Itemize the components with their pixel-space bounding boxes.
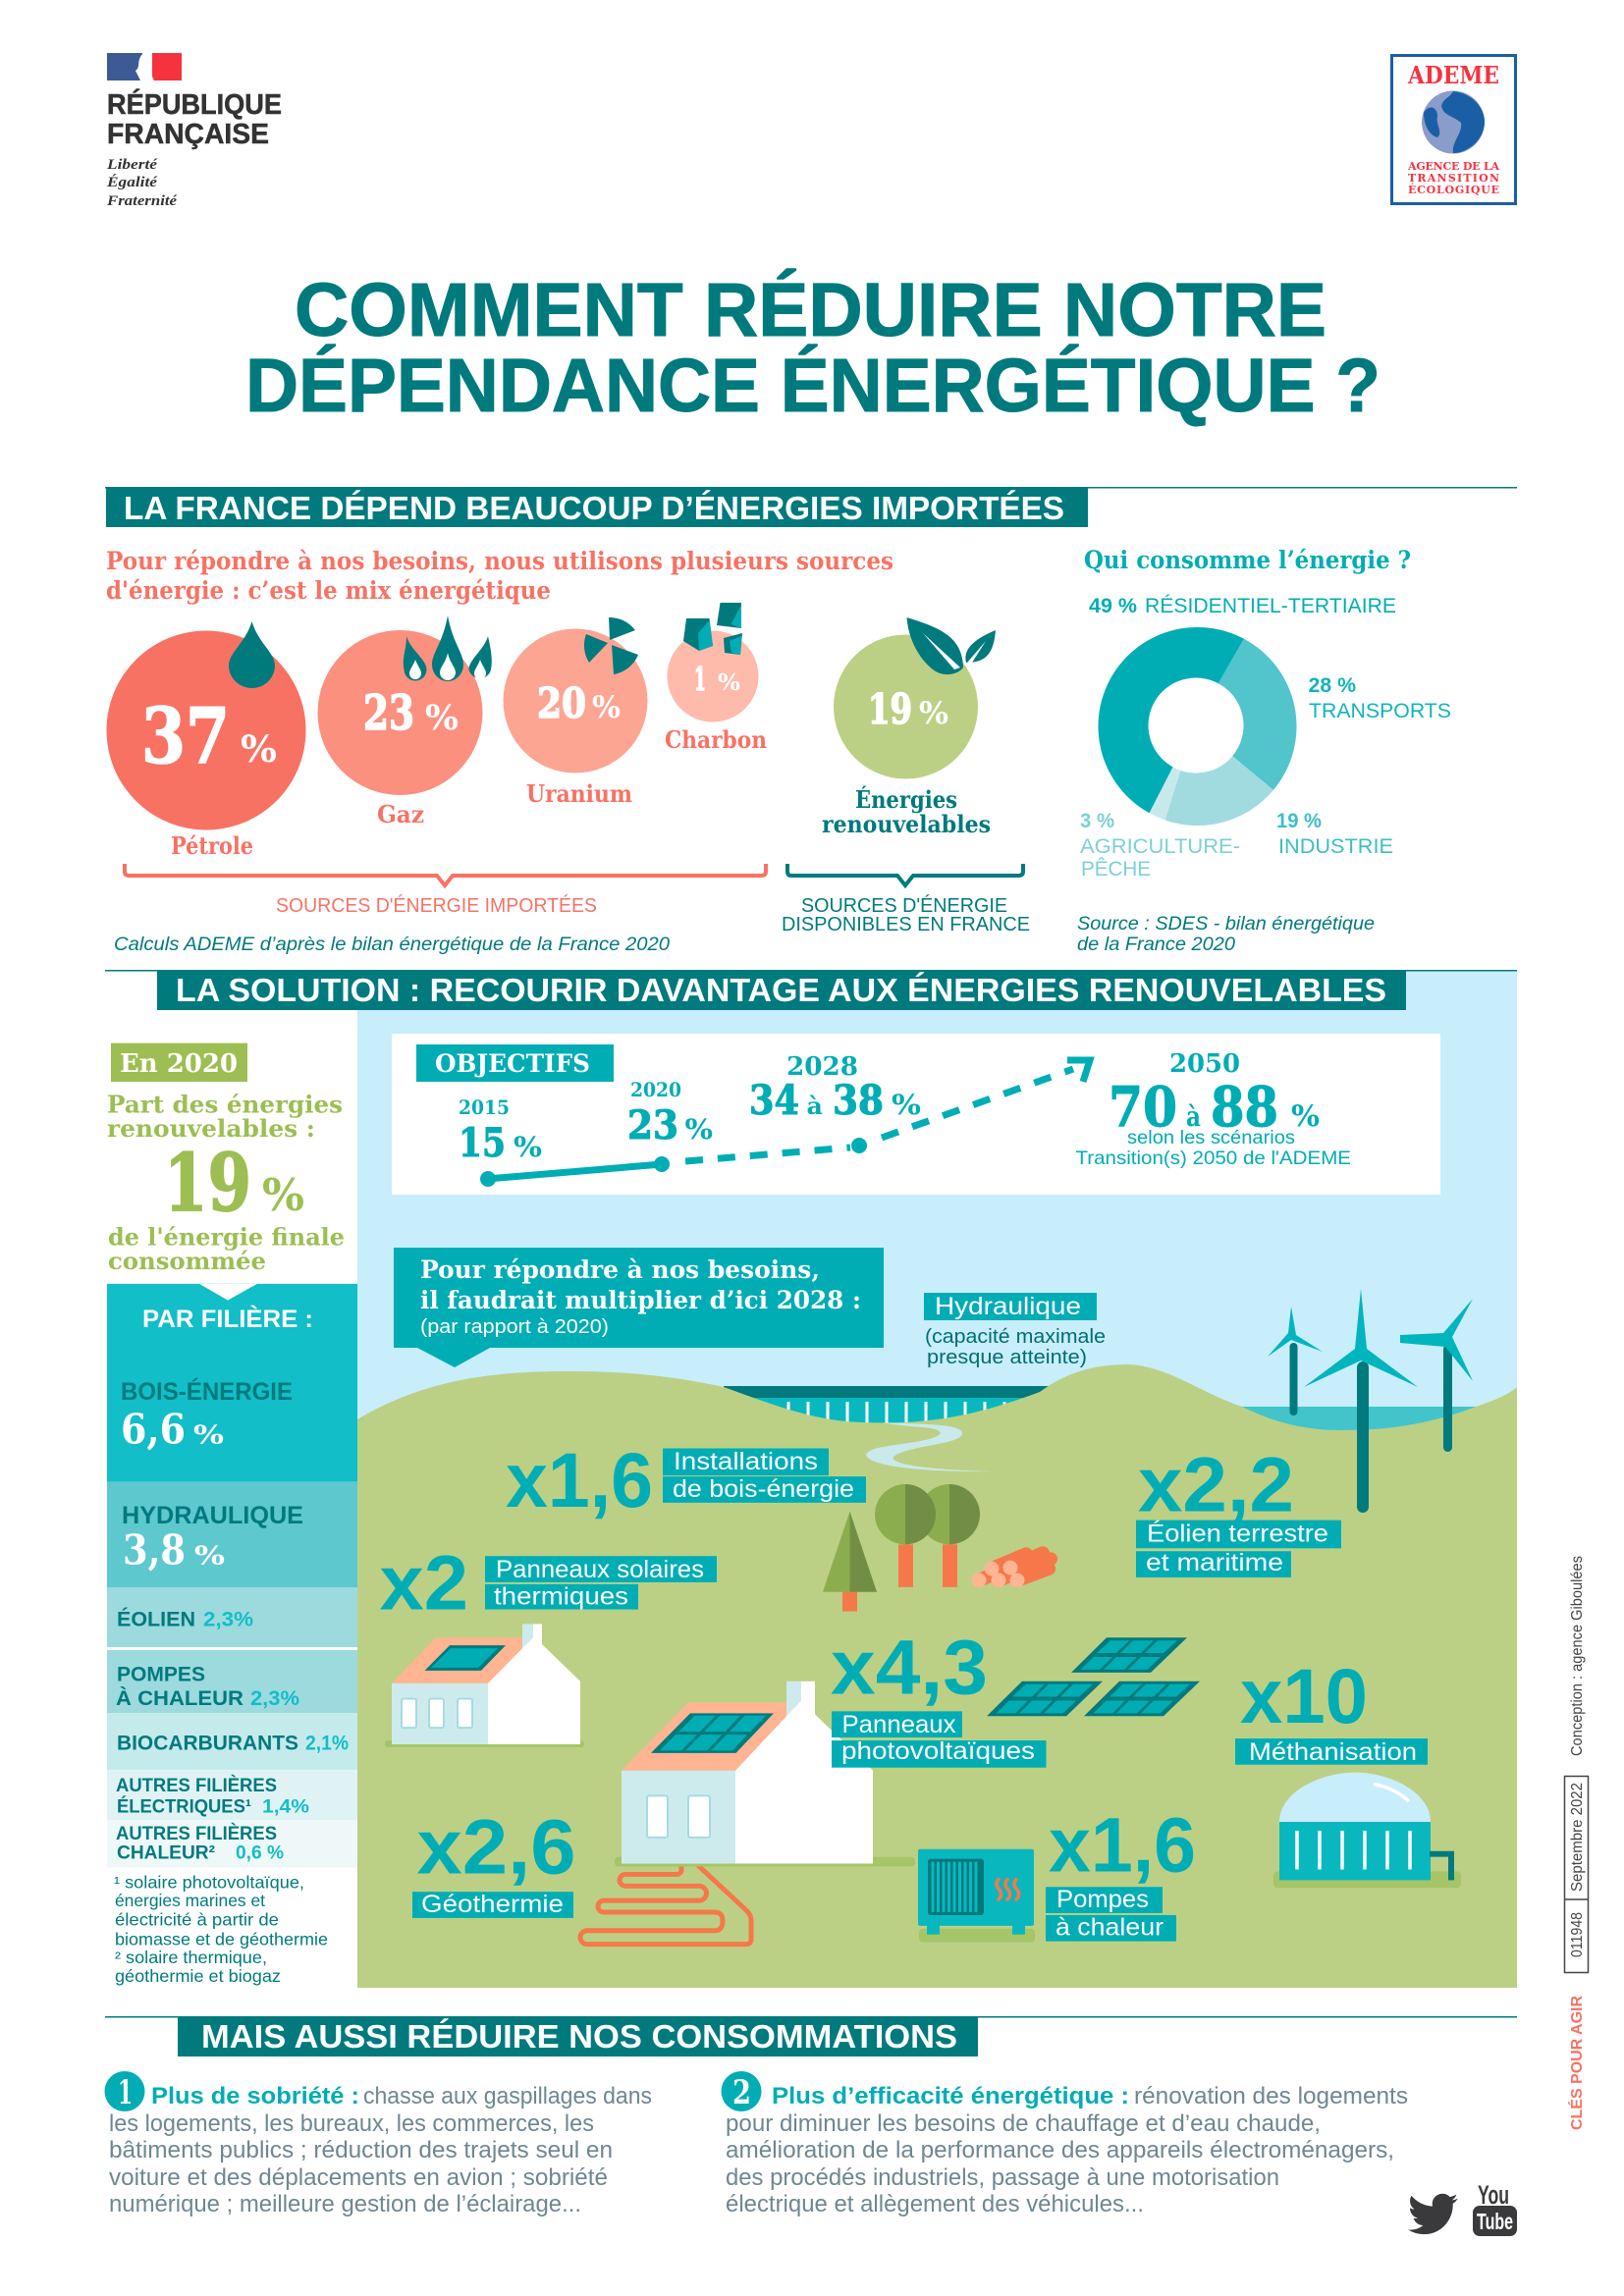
panel left <box>987 1682 1103 1716</box>
bubble: Pétrole 37 %: 37 <box>141 692 230 781</box>
text block: efficacité: rénovation des logements <box>1134 2083 1408 2109</box>
heading: energy mix: Pour répondre à nos besoins, nous utilisons plusieurs sources <box>106 547 893 575</box>
callout: multiply by 2028: (par rapport à 2020) <box>420 1316 609 1338</box>
label: residential: RÉSIDENTIEL-TERTIAIRE <box>1145 595 1396 617</box>
item: photovoltaïque: Panneaux <box>841 1712 956 1738</box>
icon: geothermal pipe <box>580 1864 751 1945</box>
scenarios note: selon les scénarios <box>1127 1128 1295 1148</box>
callout: multiply by 2028: il faudrait multiplier d’ici 2028 : <box>420 1286 861 1314</box>
label: hydraulique <box>924 1293 1106 1368</box>
panel right <box>1084 1682 1200 1716</box>
bubble: Uranium 20 % <box>503 617 648 808</box>
row: bois-énergie: % <box>193 1419 224 1450</box>
source note: Source : SDES - bilan énergétique <box>1077 913 1375 934</box>
bracket: domestic sources: DISPONIBLES EN FRANCE <box>782 913 1030 935</box>
illustration: dam <box>724 1386 1058 1427</box>
section banner: solution: LA SOLUTION : RECOURIR DAVANTAGE AUX ÉNERGIES RENOUVELABLES <box>176 972 1386 1008</box>
bracket: imported sources <box>125 864 766 917</box>
label: industry: INDUSTRIE <box>1278 835 1393 858</box>
row: autres filières chaleur: AUTRES FILIÈRES <box>116 1822 277 1844</box>
icon: oil drop <box>229 621 275 688</box>
date and reference box <box>1564 1777 1589 1973</box>
bubble: Gaz 23 %: Gaz <box>377 800 424 828</box>
title <box>245 268 1380 428</box>
panel: En 2020 share: 19 <box>164 1138 251 1230</box>
motto: Fraternité <box>106 193 179 209</box>
label: hydraulique: presque atteinte) <box>927 1347 1087 1368</box>
2050 value: 88 <box>1211 1075 1278 1140</box>
bubble: Charbon 1 %: 1 <box>694 660 706 698</box>
icon: heat pump <box>918 1849 1035 1943</box>
illustration: wind turbines <box>1268 1289 1473 1513</box>
bubble: Uranium 20 %: Uranium <box>526 779 632 808</box>
item: solaire thermique: x2 <box>379 1539 468 1626</box>
item: bois-énergie: Installations <box>674 1449 818 1475</box>
item: géothermie: Géothermie <box>421 1892 564 1918</box>
text block: efficacité: électrique et allègement des véhicules... <box>726 2191 1144 2217</box>
row: éolien: ÉOLIEN <box>117 1607 195 1630</box>
bubble: Charbon 1 % <box>665 603 767 754</box>
motto: Liberté <box>106 157 159 173</box>
icon: house with solar thermal panel <box>385 1624 584 1747</box>
logo: République Française <box>106 53 282 209</box>
2015 value: % <box>514 1131 542 1163</box>
section banner: imported energies <box>105 487 1517 527</box>
label: agriculture: 3 % <box>1080 810 1114 832</box>
row: pompes à chaleur: À CHALEUR <box>116 1685 244 1710</box>
icon: radiation <box>584 617 638 674</box>
bubble: Gaz 23 %: % <box>425 698 459 738</box>
row: autres filières chaleur: 0,6 % <box>236 1842 284 1864</box>
item: pompes à chaleur: x1,6 <box>1049 1801 1196 1888</box>
icon: YouTube: Tube <box>1477 2209 1513 2234</box>
icon: house with photovoltaic panels <box>615 1682 915 1867</box>
2020 value <box>627 1078 713 1148</box>
title: COMMENT RÉDUIRE NOTRE <box>295 268 1326 352</box>
footnotes: géothermie et biogaz <box>115 1966 281 1986</box>
logo: ADEME: AGENCE DE LA <box>1407 160 1499 173</box>
2020 value: % <box>685 1113 713 1146</box>
logo wordmark: FRANÇAISE <box>107 119 269 150</box>
item: solaire thermique: thermiques <box>494 1584 628 1611</box>
footnotes: ¹ solaire photovoltaïque, <box>114 1872 304 1892</box>
bubble: Pétrole 37 %: Pétrole <box>171 831 253 860</box>
illustration: river <box>866 1422 993 1471</box>
heading: energy mix: d'énergie : c’est le mix énergétique <box>106 576 551 605</box>
turbine large centre <box>1304 1289 1418 1513</box>
section banner: reduce consumption <box>105 2016 1517 2056</box>
text block: efficacité: amélioration de la performance des appareils électroménagers, <box>726 2137 1394 2163</box>
logo: ADEME: TRANSITION <box>1408 172 1499 185</box>
scenarios note: Transition(s) 2050 de l'ADEME <box>1076 1148 1351 1169</box>
icon: gas flames <box>404 615 492 681</box>
row: bois-énergie: BOIS-ÉNERGIE <box>121 1378 293 1406</box>
bubble: Énergies renouvelables 19 %: 19 <box>868 685 912 733</box>
callout: multiply by 2028 <box>394 1248 884 1367</box>
logo: ADEME: ADEME <box>1407 61 1499 89</box>
item: bois-énergie <box>506 1436 866 1523</box>
bubble: Énergies renouvelables 19 %: Énergies <box>855 785 957 814</box>
footnotes: énergies marines et <box>115 1891 265 1910</box>
badge 2: 2 <box>732 2073 751 2112</box>
panel: En 2020 share: Part des énergies <box>107 1091 343 1118</box>
item: bois-énergie: de bois-énergie <box>673 1476 854 1503</box>
badge 1 <box>104 2071 145 2112</box>
credits: vertical side text: Conception : agence Giboulées <box>1569 1556 1586 1756</box>
2050 value: 70 <box>1109 1075 1177 1140</box>
source note: de la France 2020 <box>1077 934 1235 955</box>
panel: objectives <box>392 1034 1440 1195</box>
row: biocarburants: 2,1% <box>305 1731 349 1754</box>
text block: efficacité: pour diminuer les besoins de chauffage et d’eau chaude, <box>726 2110 1321 2137</box>
motto <box>106 157 179 209</box>
footnotes: biomasse et de géothermie <box>115 1929 328 1949</box>
icon: globe <box>1422 90 1485 153</box>
row: hydraulique: % <box>194 1541 225 1571</box>
item: pompes à chaleur <box>1046 1801 1196 1942</box>
panel: renewable energy multipliers on the landscape <box>379 1436 1461 1945</box>
2028 value <box>749 1052 921 1124</box>
row: autres filières chaleur <box>107 1820 357 1868</box>
row: bois-énergie: 6,6 <box>121 1406 186 1454</box>
date and reference box: 011948 <box>1569 1912 1586 1957</box>
row: biocarburants: BIOCARBURANTS <box>117 1731 298 1754</box>
2028 value: 2028 <box>786 1052 858 1082</box>
heading: Qui consomme l’énergie ? <box>1084 546 1411 574</box>
2015 value: 15 <box>459 1120 506 1166</box>
text block: sobriété: bâtiments publics ; réduction des trajets seul en <box>109 2137 613 2163</box>
bubble: Uranium 20 %: % <box>592 690 621 725</box>
bubble: Énergies renouvelables 19 % <box>822 617 996 838</box>
panel: En 2020 share: renouvelables : <box>107 1114 315 1143</box>
item: photovoltaïque: x4,3 <box>831 1624 988 1710</box>
bubble: Charbon 1 %: % <box>718 669 740 696</box>
logo wordmark: RÉPUBLIQUE <box>107 87 282 121</box>
text block: efficacité: Plus d’efficacité énergétique : <box>772 2083 1129 2109</box>
2050 value: % <box>1291 1099 1320 1134</box>
row: éolien: 2,3% <box>203 1607 253 1630</box>
item: méthanisation: x10 <box>1240 1653 1368 1739</box>
2028 value: 34 <box>749 1077 799 1124</box>
2028 value: % <box>892 1089 921 1121</box>
label: transports <box>1308 674 1451 722</box>
footnotes <box>114 1872 328 1986</box>
panel: En 2020 share: % <box>262 1168 304 1221</box>
label: industry: 19 % <box>1276 810 1322 832</box>
row: autres filières électriques: 1,4% <box>262 1796 309 1817</box>
title: DÉPENDANCE ÉNERGÉTIQUE ? <box>245 344 1380 428</box>
round tree back <box>919 1484 980 1587</box>
item: pompes à chaleur: à chaleur <box>1056 1915 1164 1942</box>
item: solaire thermique: Panneaux solaires <box>496 1557 704 1583</box>
icon: French flag with Marianne <box>107 53 182 80</box>
row: pompes à chaleur <box>107 1650 357 1713</box>
item: éolien: x2,2 <box>1138 1441 1294 1528</box>
2028 value: 38 <box>833 1077 884 1124</box>
item: photovoltaïque <box>831 1624 1047 1768</box>
bubble: Pétrole 37 % <box>106 621 306 860</box>
badge: En 2020 <box>120 1048 238 1079</box>
label: transports: 28 % <box>1308 674 1356 697</box>
row: hydraulique: 3,8 <box>123 1526 186 1575</box>
label: industry <box>1276 810 1393 858</box>
item: méthanisation: Méthanisation <box>1249 1739 1417 1766</box>
icon: coal <box>683 603 742 655</box>
bubble: Énergies renouvelables 19 %: renouvelables <box>822 810 991 838</box>
row: éolien <box>107 1587 357 1647</box>
text block: sobriété: voiture et des déplacements en avion ; sobriété <box>109 2164 608 2191</box>
turbine right <box>1400 1299 1473 1452</box>
icon: solar panels array <box>987 1637 1200 1716</box>
2050 value: 2050 <box>1169 1049 1240 1079</box>
text block: efficacité <box>721 2071 1408 2217</box>
source note <box>1077 913 1375 955</box>
section banner: reduce consumption: MAIS AUSSI RÉDUIRE NOS CONSOMMATIONS <box>201 2018 957 2055</box>
label: hydraulique: (capacité maximale <box>925 1326 1106 1348</box>
panel: by sector <box>107 1284 357 1986</box>
label: transports: TRANSPORTS <box>1309 700 1451 722</box>
logo wordmark <box>107 87 282 150</box>
2015 value <box>459 1095 542 1166</box>
bubble: Gaz 23 % <box>318 615 492 828</box>
row: autres filières électriques: AUTRES FILIÈRES <box>116 1774 277 1796</box>
item: méthanisation <box>1235 1653 1428 1766</box>
bubble: Pétrole 37 %: % <box>241 727 277 771</box>
panel: En 2020 share: de l'énergie finale <box>108 1223 345 1251</box>
2028 value: à <box>807 1092 823 1120</box>
panel: En 2020 share: consommée <box>108 1247 266 1275</box>
fir tree <box>823 1512 877 1612</box>
icon: YouTube: You <box>1478 2180 1509 2210</box>
section banner: imported energies: LA FRANCE DÉPEND BEAUCOUP D’ÉNERGIES IMPORTÉES <box>124 490 1064 526</box>
text block: sobriété: les logements, les bureaux, les commerces, les <box>109 2110 594 2137</box>
bubble: Gaz 23 %: 23 <box>363 684 414 741</box>
label: agriculture: AGRICULTURE- <box>1080 835 1240 858</box>
bubble: Énergies renouvelables 19 %: % <box>919 696 948 731</box>
2050 value: à <box>1186 1100 1201 1133</box>
item: photovoltaïque: photovoltaïques <box>841 1738 1035 1765</box>
label: hydraulique: Hydraulique <box>935 1293 1081 1320</box>
donut chart <box>1098 627 1297 826</box>
row: bois-énergie <box>107 1284 357 1482</box>
credits: vertical side text <box>1564 1556 1589 2130</box>
bubble: Charbon 1 %: Charbon <box>665 725 767 754</box>
2050 value <box>1109 1049 1320 1140</box>
badge 2 <box>721 2071 762 2112</box>
row: autres filières chaleur: CHALEUR² <box>117 1842 215 1864</box>
text block: sobriété: numérique ; meilleure gestion de l’éclairage... <box>109 2191 581 2217</box>
panel: sky background <box>357 971 1517 1422</box>
row: pompes à chaleur: POMPES <box>117 1662 205 1685</box>
logs <box>972 1553 1051 1587</box>
bracket: domestic sources: SOURCES D'ÉNERGIE <box>801 894 1007 917</box>
badge 1: 1 <box>118 2073 133 2112</box>
row: biocarburants <box>107 1713 357 1770</box>
icon: biogas digester <box>1273 1773 1461 1888</box>
text block: sobriété: Plus de sobriété : <box>151 2083 359 2109</box>
row: hydraulique <box>107 1482 357 1587</box>
row: hydraulique: HYDRAULIQUE <box>122 1503 303 1529</box>
item: solaire thermique <box>379 1539 717 1626</box>
icon: Twitter <box>1408 2194 1458 2234</box>
credits: vertical side text: CLÉS POUR AGIR <box>1567 1996 1586 2130</box>
2020 value: 2020 <box>630 1078 681 1101</box>
row: autres filières électriques: ÉLECTRIQUES¹ <box>117 1795 251 1817</box>
footnotes: ² solaire thermique, <box>115 1948 267 1967</box>
callout: multiply by 2028: Pour répondre à nos besoins, <box>420 1255 820 1284</box>
label: agriculture <box>1080 810 1240 881</box>
text block: sobriété <box>104 2071 652 2217</box>
item: bois-énergie: x1,6 <box>506 1436 653 1523</box>
text block: sobriété: chasse aux gaspillages dans <box>363 2083 652 2109</box>
row: bois-énergie: PAR FILIÈRE : <box>142 1306 313 1333</box>
turbine small left <box>1268 1307 1323 1415</box>
item: éolien <box>1136 1441 1341 1577</box>
motto: Égalité <box>106 174 159 190</box>
bracket: domestic sources <box>782 864 1030 935</box>
date and reference box: Septembre 2022 <box>1569 1783 1586 1892</box>
bubble: Uranium 20 %: 20 <box>537 679 586 727</box>
illustration: sea <box>1227 1407 1476 1443</box>
panel top <box>1071 1637 1187 1673</box>
bracket: imported sources: SOURCES D'ÉNERGIE IMPORTÉES <box>276 894 597 917</box>
text block: efficacité: des procédés industriels, passage à une motorisation <box>726 2164 1279 2191</box>
badge: objectifs <box>416 1044 614 1082</box>
item: pompes à chaleur: Pompes <box>1056 1887 1149 1913</box>
logo: ADEME <box>1392 55 1516 204</box>
trend line <box>480 1060 1090 1187</box>
icon: leaves <box>907 617 996 674</box>
icon: trees and logs <box>823 1484 1051 1612</box>
row: autres filières électriques <box>107 1770 357 1820</box>
scenarios note <box>1076 1128 1351 1169</box>
illustration: hills <box>357 1364 1517 1988</box>
panel: En 2020 share <box>107 1043 345 1275</box>
item: éolien: Éolien terrestre <box>1147 1520 1328 1547</box>
footnotes: électricité à partir de <box>115 1910 279 1930</box>
badge: objectifs: OBJECTIFS <box>435 1049 590 1078</box>
source note: mix: Calculs ADEME d’après le bilan énergétique de la France 2020 <box>114 934 670 955</box>
logo: ADEME: ÉCOLOGIQUE <box>1408 183 1499 196</box>
row: pompes à chaleur: 2,3% <box>250 1685 299 1710</box>
heading: energy mix <box>106 547 893 605</box>
label: residential: 49 % <box>1089 595 1137 617</box>
icon: YouTube <box>1473 2180 1517 2236</box>
label: agriculture: PÊCHE <box>1081 858 1151 881</box>
round tree front <box>875 1484 936 1587</box>
panel: who consumes energy <box>1077 546 1451 955</box>
2020 value: 23 <box>627 1102 678 1148</box>
item: géothermie: x2,6 <box>416 1803 575 1890</box>
2015 value: 2015 <box>459 1095 510 1119</box>
item: éolien: et maritime <box>1146 1550 1283 1576</box>
